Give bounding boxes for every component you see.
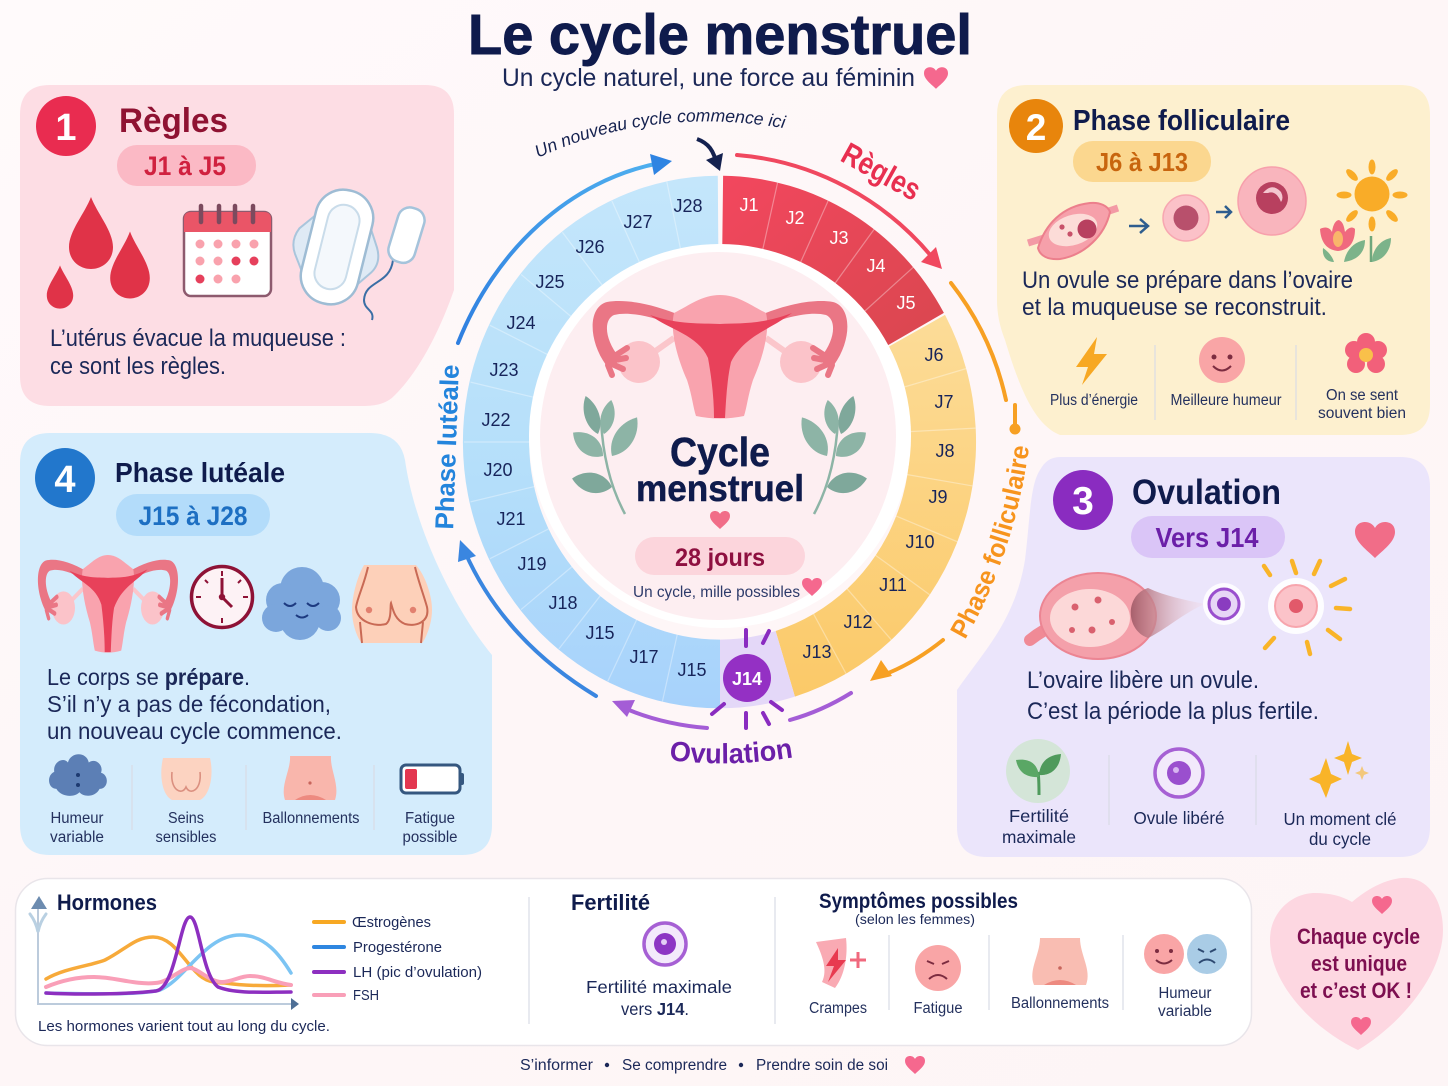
callout text: est unique bbox=[1311, 951, 1407, 976]
centre title bbox=[636, 429, 804, 509]
label: phase lutéale: Phase lutéale bbox=[429, 364, 465, 530]
icon: ovule with rays bbox=[1264, 561, 1350, 654]
day labels: J6 bbox=[924, 345, 944, 365]
day labels: J28 bbox=[673, 196, 703, 216]
panel 4: phase lutéale bbox=[20, 433, 492, 855]
label: phase folliculaire: Phase folliculaire bbox=[950, 446, 1028, 638]
text: règles bbox=[50, 325, 346, 380]
caption: Les hormones varient tout au long du cycle. bbox=[38, 1018, 330, 1035]
icon: flowers bbox=[1320, 220, 1391, 262]
label: ovulation: Ovulation bbox=[671, 741, 792, 764]
segment: ovulation bbox=[720, 631, 795, 708]
J14 ovulation marker: J14 bbox=[732, 669, 762, 689]
day labels: J27 bbox=[623, 212, 653, 232]
legend bbox=[314, 914, 482, 1004]
icon: ovule bbox=[644, 923, 686, 965]
text: fertilité maximale: Fertilité maximale bbox=[586, 977, 732, 997]
icon: cloud face bbox=[262, 567, 341, 640]
label: règles: Règles bbox=[836, 136, 927, 207]
icon: ovule bbox=[1155, 749, 1203, 797]
day labels: J12 bbox=[843, 612, 873, 632]
label: seins sensibles bbox=[156, 810, 217, 846]
ring segments bbox=[463, 176, 976, 708]
label: un moment clé du cycle bbox=[1284, 809, 1396, 849]
day labels: J15 bbox=[677, 660, 707, 680]
label: un moment clé du cycle: du cycle bbox=[1309, 829, 1371, 849]
footer: Prendre soin de soi bbox=[756, 1057, 888, 1074]
icon: small cloud bbox=[49, 754, 107, 796]
icon: cramps bbox=[816, 938, 866, 988]
label: humeur variable bbox=[1158, 985, 1212, 1020]
icon: sparkles bbox=[1309, 741, 1369, 798]
label: meilleure humeur: Meilleure humeur bbox=[1170, 392, 1282, 409]
text: règles: L’utérus évacue la muqueuse : bbox=[50, 325, 346, 352]
legend: FSH bbox=[353, 987, 379, 1004]
icon: released ovule bbox=[1203, 583, 1245, 625]
heading hormones: Hormones bbox=[57, 890, 157, 915]
icon: calendar bbox=[184, 206, 271, 296]
label: on se sent souvent bien bbox=[1318, 387, 1406, 422]
panel 2: phase folliculaire bbox=[997, 85, 1430, 435]
label: ovulation bbox=[671, 741, 792, 764]
heading règles: Règles bbox=[119, 102, 228, 140]
leaves right bbox=[794, 394, 872, 514]
label: ballonnements: Ballonnements bbox=[1011, 995, 1109, 1012]
title: Le cycle menstruel bbox=[468, 3, 972, 67]
segment: phase lutéale bbox=[463, 176, 720, 708]
legend: LH (pic d’ovulation) bbox=[353, 964, 482, 981]
text: ovulation: L’ovaire libère un ovule. bbox=[1027, 667, 1259, 694]
icon: ovary releasing ovule bbox=[1030, 573, 1205, 659]
icon: battery bbox=[401, 765, 464, 793]
day labels: J2 bbox=[785, 208, 805, 228]
icon: bloated belly bbox=[284, 756, 336, 800]
arrow: phase lutéale top bbox=[458, 154, 672, 343]
text: ovulation bbox=[1027, 667, 1319, 725]
legend: Progestérone bbox=[353, 939, 442, 956]
text: phase folliculaire bbox=[1022, 267, 1353, 321]
day labels bbox=[481, 195, 955, 680]
text: phase lutéale: Le corps se prépare. bbox=[47, 664, 250, 690]
pill J6 à J13 bbox=[1073, 141, 1211, 182]
panel 3: ovulation bbox=[957, 457, 1430, 857]
pill J15 à J28 bbox=[116, 494, 270, 536]
icon: tampon bbox=[364, 204, 428, 320]
number badge 2 bbox=[1009, 99, 1063, 153]
text: règles: ce sont les règles. bbox=[50, 353, 226, 380]
icon: flower bbox=[1345, 333, 1387, 373]
small heart bbox=[710, 511, 730, 529]
icon: sensitive breasts bbox=[161, 758, 212, 800]
leaves left bbox=[567, 394, 645, 514]
label: humeur variable: variable bbox=[50, 829, 104, 846]
icon: mature follicle bbox=[1238, 167, 1306, 235]
label: fatigue possible: possible bbox=[402, 829, 458, 846]
icon: smile bbox=[1199, 337, 1245, 383]
day labels: J17 bbox=[629, 647, 659, 667]
heading symptômes: Symptômes possibles bbox=[819, 890, 1018, 913]
heading ovulation: Ovulation bbox=[1132, 473, 1281, 512]
day labels: J8 bbox=[935, 441, 955, 461]
label: ballonnements: Ballonnements bbox=[262, 810, 360, 827]
arrow bbox=[1216, 206, 1231, 218]
uterus illustration bbox=[593, 295, 847, 418]
hormone chart bbox=[30, 896, 299, 1010]
label: plus d'énergie: Plus d’énergie bbox=[1050, 392, 1138, 409]
icon: lightning bbox=[1076, 337, 1107, 385]
number badge 1: 1 bbox=[55, 107, 77, 149]
centre title: Cycle bbox=[670, 429, 770, 475]
pill J1 à J5 bbox=[117, 145, 256, 186]
footer: S’informer bbox=[520, 1057, 593, 1074]
tagline: Un cycle, mille possibles bbox=[633, 584, 800, 601]
icon: sprout bbox=[1006, 739, 1070, 803]
pill J15 à J28: J15 à J28 bbox=[138, 501, 248, 531]
number badge 1 bbox=[36, 96, 96, 156]
label: ovule libéré: Ovule libéré bbox=[1134, 808, 1224, 828]
text: phase folliculaire: Un ovule se prépare dans l’ovaire bbox=[1022, 267, 1353, 294]
pill J1 à J5: J1 à J5 bbox=[144, 151, 226, 181]
icon: breasts bbox=[352, 565, 432, 643]
arrow: ovulation bbox=[612, 693, 851, 728]
label: fertilité maximale bbox=[1002, 806, 1076, 847]
legend: Œstrogènes bbox=[352, 914, 431, 931]
label: on se sent souvent bien: On se sent bbox=[1326, 387, 1399, 404]
heading phase folliculaire: Phase folliculaire bbox=[1073, 105, 1290, 137]
heading fertilité: Fertilité bbox=[571, 890, 650, 915]
note selon les femmes: (selon les femmes) bbox=[855, 911, 975, 927]
day labels: J13 bbox=[802, 642, 832, 662]
arrow note: un nouveau cycle commence ici: Un nouveau cycle commence ici bbox=[536, 111, 787, 156]
day labels: J26 bbox=[575, 237, 605, 257]
label: fertilité maximale: maximale bbox=[1002, 827, 1076, 847]
subtitle: Un cycle naturel, une force au féminin bbox=[502, 64, 915, 92]
J14 ovulation marker bbox=[712, 630, 782, 728]
tagline bbox=[633, 578, 822, 601]
label: humeur variable: variable bbox=[1158, 1003, 1212, 1020]
label: fatigue possible bbox=[402, 810, 458, 846]
text: fertilité maximale: vers J14. bbox=[621, 999, 689, 1019]
number badge 4: 4 bbox=[54, 459, 76, 501]
day labels: J22 bbox=[481, 410, 511, 430]
day labels: J19 bbox=[517, 554, 547, 574]
text: phase lutéale bbox=[47, 664, 342, 744]
day labels: J1 bbox=[739, 195, 759, 215]
arrow bbox=[1129, 219, 1148, 233]
bottom panel bbox=[16, 878, 1252, 1046]
day labels: J9 bbox=[928, 487, 948, 507]
number badge 3 bbox=[1053, 470, 1113, 530]
text: phase lutéale: S’il n’y a pas de fécondation, bbox=[47, 691, 331, 717]
label: on se sent souvent bien: souvent bien bbox=[1318, 405, 1406, 422]
label: fatigue possible: Fatigue bbox=[405, 810, 455, 827]
number badge 2: 2 bbox=[1026, 107, 1046, 148]
text: phase lutéale: un nouveau cycle commence. bbox=[47, 718, 342, 744]
label: humeur variable bbox=[50, 810, 104, 846]
bottom small heart bbox=[1351, 1017, 1371, 1035]
fertilité section bbox=[571, 890, 732, 1019]
label: fatigue: Fatigue bbox=[914, 1000, 962, 1017]
label: seins sensibles: Seins bbox=[168, 810, 204, 827]
icon: heart bbox=[1355, 522, 1395, 558]
pill vers J14 bbox=[1131, 516, 1285, 558]
text: fertilité maximale bbox=[586, 977, 732, 1019]
icon: growing follicle bbox=[1163, 195, 1209, 241]
footer bbox=[520, 1056, 925, 1074]
panel 1: règles bbox=[20, 85, 454, 406]
icon: two mood faces bbox=[1144, 934, 1227, 974]
number badge 3: 3 bbox=[1072, 480, 1094, 523]
callout text: Chaque cycle bbox=[1297, 924, 1420, 949]
symptômes section bbox=[809, 890, 1227, 1020]
segment: phase folliculaire bbox=[776, 315, 976, 697]
day labels: J20 bbox=[483, 460, 513, 480]
icon: sad face bbox=[915, 945, 961, 991]
icon: sanitary pad bbox=[281, 180, 393, 314]
heading phase lutéale: Phase lutéale bbox=[115, 457, 285, 488]
pill 28 jours: 28 jours bbox=[675, 544, 765, 572]
day labels: J11 bbox=[879, 575, 907, 595]
label: crampes: Crampes bbox=[809, 1000, 867, 1017]
day labels: J18 bbox=[548, 593, 578, 613]
day labels: J4 bbox=[866, 256, 886, 276]
pill vers J14: Vers J14 bbox=[1156, 522, 1259, 553]
text: ovulation: C’est la période la plus fertile. bbox=[1027, 698, 1319, 725]
pill 28 jours bbox=[635, 537, 805, 575]
label: humeur variable: Humeur bbox=[1158, 985, 1212, 1002]
day labels: J25 bbox=[535, 272, 565, 292]
callout text bbox=[1297, 924, 1420, 1003]
cycle wheel bbox=[463, 176, 976, 728]
day labels: J7 bbox=[934, 392, 954, 412]
icon: belly bbox=[1032, 938, 1088, 985]
arrow: règles bbox=[737, 155, 942, 269]
arrow: phase lutéale bottom bbox=[458, 540, 596, 696]
hormones section bbox=[30, 890, 482, 1035]
day labels: J23 bbox=[489, 360, 519, 380]
icon: ovary bbox=[1028, 203, 1118, 259]
callout text: et c’est OK ! bbox=[1300, 978, 1412, 1003]
number badge 4 bbox=[35, 448, 95, 508]
day labels: J21 bbox=[496, 509, 526, 529]
pill J6 à J13: J6 à J13 bbox=[1096, 147, 1188, 177]
segment: règles bbox=[722, 176, 944, 346]
label: un moment clé du cycle: Un moment clé bbox=[1284, 809, 1396, 829]
arrow: phase folliculaire bbox=[870, 283, 1020, 681]
icon: sun bbox=[1336, 160, 1408, 232]
day labels: J3 bbox=[829, 228, 849, 248]
label: humeur variable: Humeur bbox=[50, 810, 104, 827]
icon: clock bbox=[192, 566, 252, 628]
centre disc bbox=[529, 244, 911, 628]
day labels: J15 bbox=[585, 623, 615, 643]
label: fertilité maximale: Fertilité bbox=[1009, 806, 1069, 826]
top small heart bbox=[1372, 896, 1392, 914]
label: seins sensibles: sensibles bbox=[156, 829, 217, 846]
day labels: J5 bbox=[896, 293, 916, 313]
day labels: J10 bbox=[905, 532, 935, 552]
icon: uterus bbox=[38, 555, 178, 653]
day labels: J24 bbox=[506, 313, 536, 333]
heart callout bbox=[1270, 878, 1443, 1050]
centre title: menstruel bbox=[636, 468, 804, 509]
footer: Se comprendre bbox=[622, 1057, 727, 1074]
icon: blood drops bbox=[47, 197, 150, 309]
text: phase folliculaire: et la muqueuse se reconstruit. bbox=[1022, 294, 1327, 321]
